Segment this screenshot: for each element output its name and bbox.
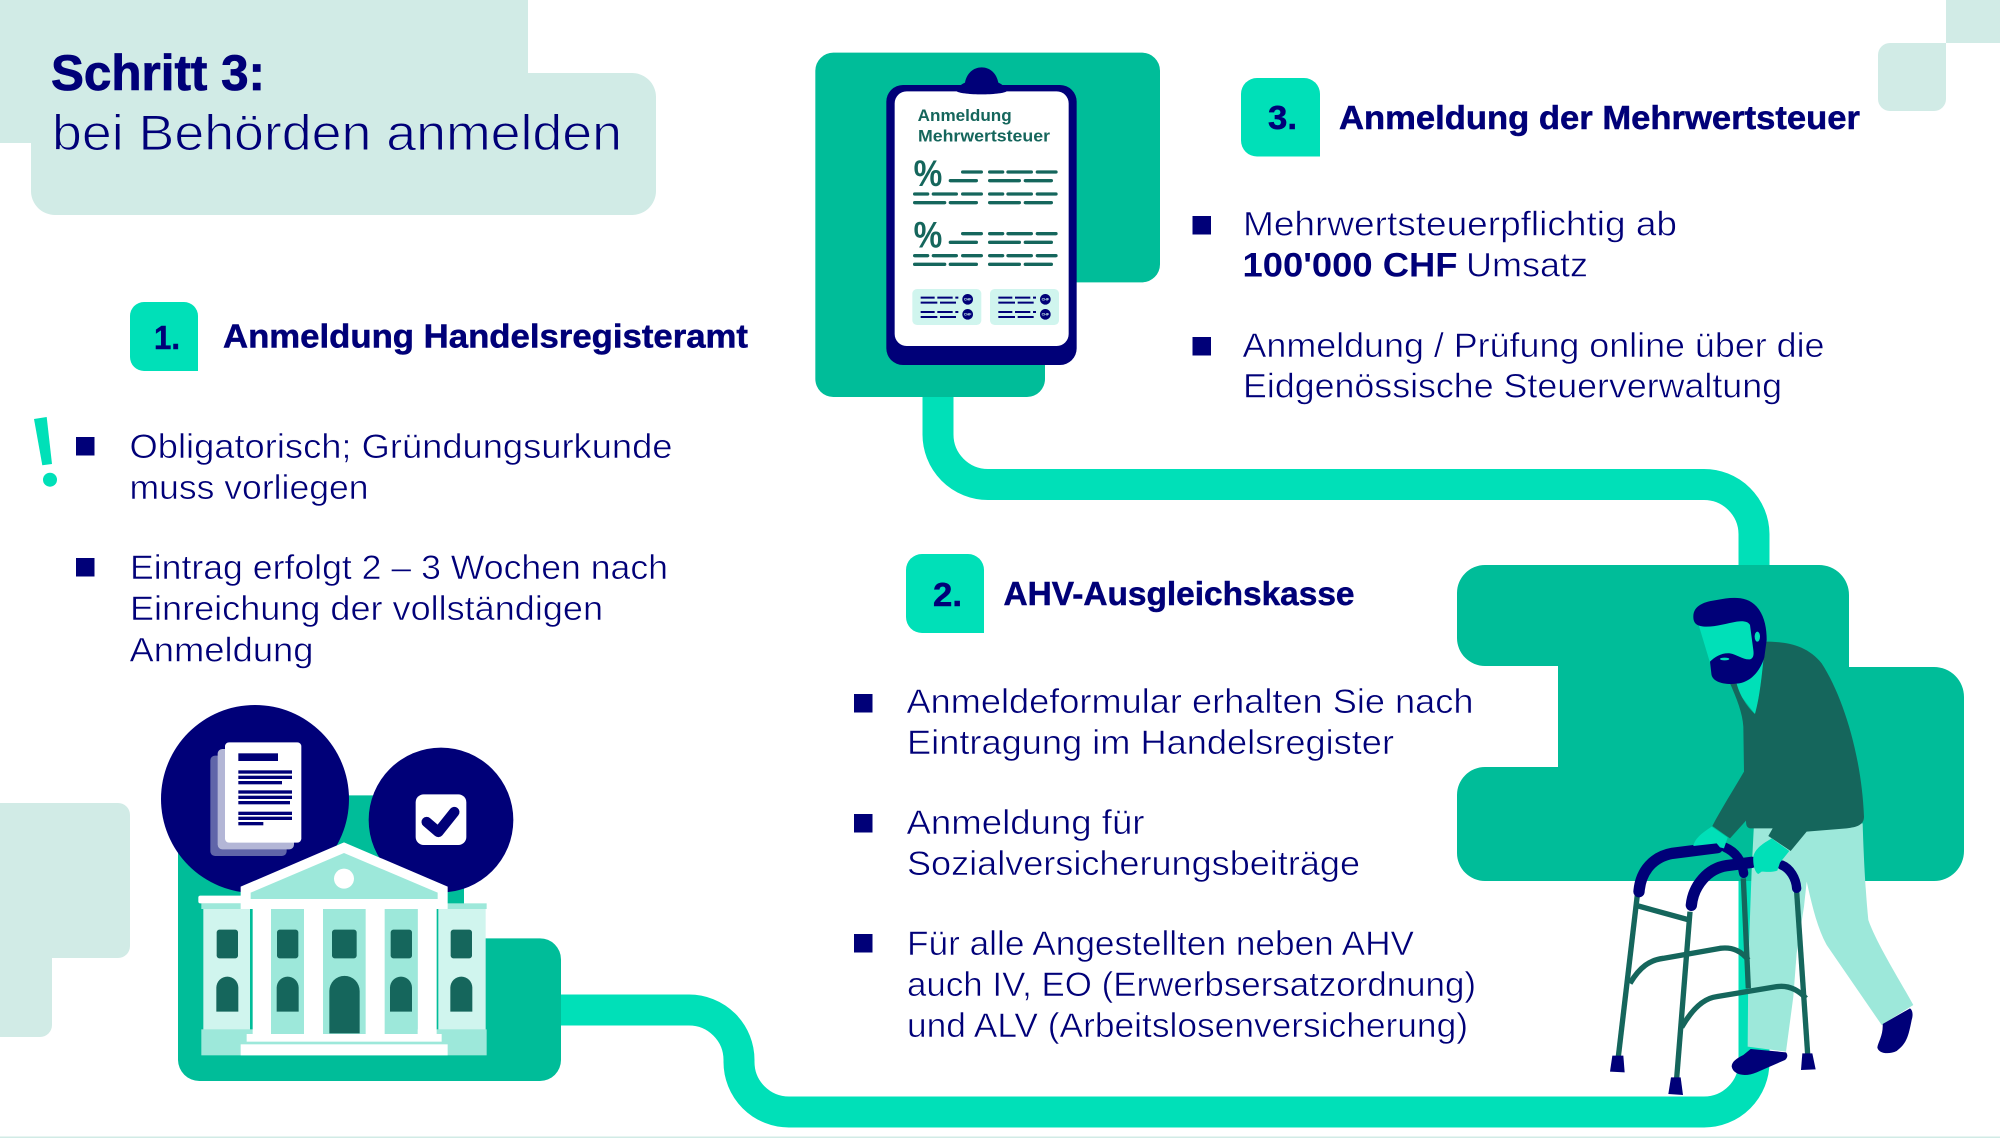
subtitle: bei Behörden anmelden [52, 105, 622, 161]
badge 2 [906, 554, 984, 633]
sweater [1712, 642, 1864, 851]
bullet list 2: Anmeldeformular erhalten Sie nach [906, 683, 1474, 721]
CHF summary box right: CHF [1042, 313, 1050, 317]
illustration backdrop: man panel [1457, 565, 1964, 881]
heading 1: Anmeldung Handelsregisteramt [223, 318, 748, 354]
walker feet [1610, 1053, 1816, 1095]
illustration: elderly man with walker [1610, 598, 1913, 1095]
bullet list 3: Mehrwertsteuerpflichtig ab [1243, 206, 1677, 244]
bullet list 1: muss vorliegen [130, 469, 368, 507]
percent lines block 2 [914, 214, 1056, 264]
CHF summary box right [990, 289, 1059, 325]
bullet list 1: Einreichung der vollständigen [130, 590, 603, 628]
CHF summary box left: CHF [964, 298, 972, 302]
badge 1: 1. [154, 319, 180, 356]
percent lines block 1 [914, 152, 1056, 203]
clipboard sheet [895, 91, 1069, 346]
building backdrop panel [178, 795, 561, 1081]
bullet list 1: Obligatorisch; Gründungsurkunde [130, 428, 672, 466]
neck and chest [1730, 657, 1764, 714]
decoration: left squares [0, 803, 130, 1037]
trousers [1748, 823, 1913, 1052]
badge 3: 3. [1268, 99, 1297, 136]
bullet list 3: 100'000 CHF [1242, 246, 1458, 284]
form title [918, 107, 1051, 146]
section 2: AHV-Ausgleichskasse [854, 554, 1476, 1045]
clipboard backdrop panel [815, 53, 1160, 397]
header panel [0, 0, 656, 215]
icon: documents circle [161, 705, 349, 893]
walker handles [1639, 847, 1797, 905]
connector path [561, 397, 1754, 1112]
section 3: Mehrwertsteuer [1192, 78, 1860, 406]
form title: Mehrwertsteuer [918, 128, 1051, 146]
clipboard board [886, 85, 1077, 365]
bullet list 3: Umsatz [1466, 246, 1588, 284]
heading 2: AHV-Ausgleichskasse [1004, 575, 1354, 612]
bullet list 2: Eintragung im Handelsregister [907, 724, 1394, 762]
heading 3: Anmeldung der Mehrwertsteuer [1339, 99, 1860, 136]
badge 1 [130, 302, 198, 371]
illustration: VAT clipboard [815, 53, 1160, 397]
ear and mouth [1720, 632, 1760, 660]
form title: Anmeldung [918, 107, 1012, 125]
icon: checkmark circle [369, 748, 513, 892]
walker frame [1618, 878, 1808, 1078]
bullet list 2: Für alle Angestellten neben AHV [907, 925, 1414, 963]
bullet list 1: Eintrag erfolgt 2 – 3 Wochen nach [130, 549, 668, 587]
bullet list 2: Anmeldung für [906, 804, 1144, 842]
icon: exclamation mark [34, 417, 57, 487]
bullet list 2 [854, 683, 1476, 1045]
title: Schritt 3: Schritt 3: [51, 45, 265, 101]
bullet list 3: Anmeldung / Prüfung online über die [1242, 327, 1824, 365]
building [198, 842, 487, 1055]
percent lines block 1: % [914, 152, 942, 194]
percent lines block 2: % [914, 214, 942, 256]
bullet list 3: Eidgenössische Steuerverwaltung [1243, 368, 1782, 406]
bullet list 2: Sozialversicherungsbeiträge [907, 845, 1360, 883]
shoes [1732, 1008, 1913, 1075]
bullet list 1: Anmeldung [130, 632, 314, 670]
bullet list 2: auch IV, EO (Erwerbsersatzordnung) [907, 966, 1476, 1004]
CHF summary box right: CHF [1042, 298, 1050, 302]
section 1: Handelsregisteramt [34, 302, 748, 670]
CHF summary box left: CHF [964, 313, 972, 317]
CHF summary box left [912, 289, 981, 325]
decoration: top right squares [1878, 0, 2000, 111]
hair and beard [1693, 598, 1767, 684]
hands [1693, 827, 1789, 874]
bullet list 2: und ALV (Arbeitslosenversicherung) [907, 1007, 1468, 1045]
clipboard clip [957, 67, 1007, 94]
illustration: government building [161, 705, 561, 1081]
face [1699, 620, 1757, 667]
bullet list 3 [1192, 206, 1824, 406]
badge 3 [1241, 78, 1320, 156]
bullet list 1 [76, 428, 672, 670]
badge 2: 2. [933, 576, 962, 613]
